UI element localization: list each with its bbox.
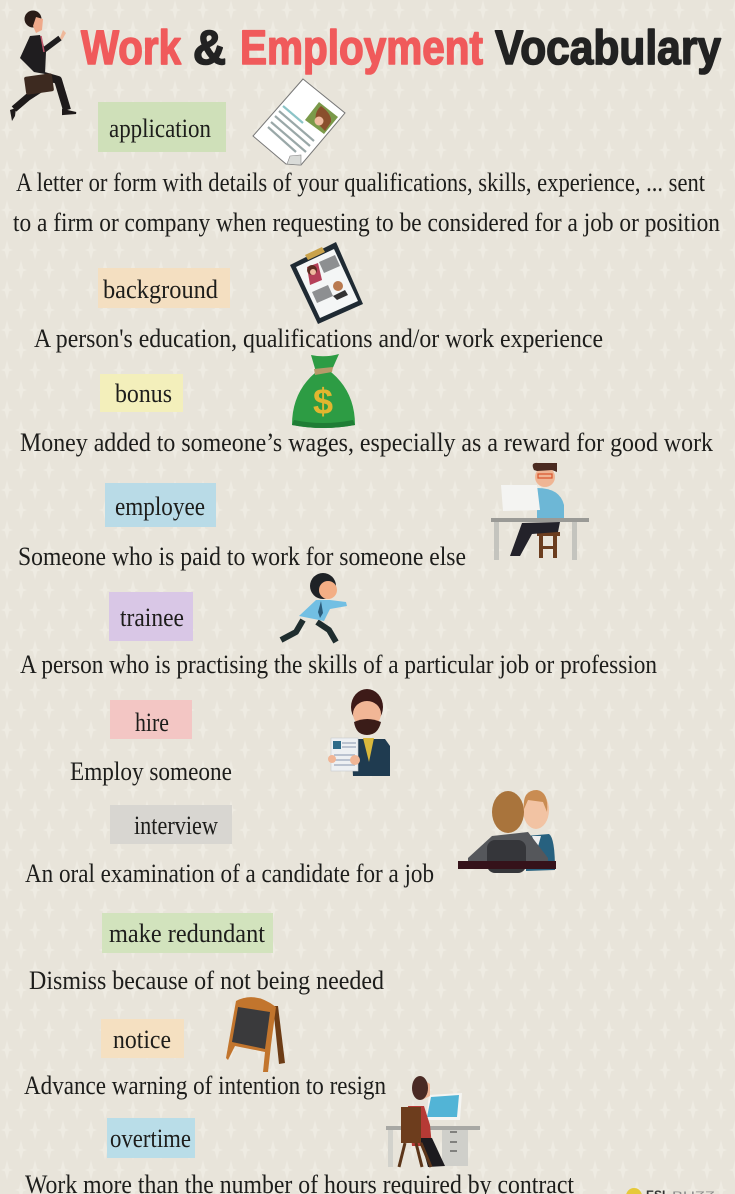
icon: money bag: $ [313, 381, 333, 422]
title: & [193, 22, 226, 75]
label: trainee: trainee [120, 603, 184, 632]
icon: application form [253, 79, 345, 165]
icon: clipboard resume [290, 242, 363, 324]
icon: hiring manager [328, 689, 390, 776]
definition: interview: An oral examination of a candidate for a job [25, 859, 434, 888]
label: background: background [103, 275, 218, 304]
label: employee: employee [115, 492, 205, 521]
label: overtime [107, 1118, 195, 1158]
label: overtime: overtime [110, 1124, 191, 1153]
label: employee [105, 483, 216, 527]
icon: running trainee [281, 573, 347, 642]
label: bonus [100, 374, 183, 412]
label: bonus: bonus [115, 379, 172, 408]
definition: hire: Employ someone [70, 757, 232, 786]
label: hire: hire [135, 708, 169, 737]
title: Work [81, 22, 181, 75]
definition: trainee: A person who is practising the skills of a particular job or profession [20, 650, 657, 679]
icon: running businessman [10, 10, 76, 121]
title [81, 22, 721, 75]
label: application [98, 102, 226, 152]
label: trainee [109, 592, 193, 641]
label: hire [110, 700, 192, 739]
icon: employee at desk [491, 463, 589, 560]
label: application: application [109, 114, 211, 143]
definition: notice: Advance warning of intention to resign [24, 1071, 386, 1100]
icon: notice board [226, 997, 285, 1072]
label: notice [101, 1019, 184, 1058]
definition: employee: Someone who is paid to work for someone else [18, 542, 466, 571]
label: notice: notice [113, 1025, 171, 1054]
icon: overtime at computer [386, 1076, 480, 1167]
label: interview: interview [134, 811, 218, 840]
definition: background: A person's education, qualifications and/or work experience [34, 324, 603, 353]
title: Employment [240, 22, 483, 75]
icon: money bag [292, 354, 355, 428]
label: make redundant: make redundant [109, 919, 266, 948]
logo: ESL [626, 1188, 716, 1194]
definition: application [13, 168, 720, 237]
label: make redundant [102, 913, 273, 953]
definition: make redundant: Dismiss because of not being needed [29, 966, 384, 995]
label: background [98, 268, 230, 308]
label: interview [110, 805, 232, 844]
icon: interview scene [458, 790, 556, 873]
